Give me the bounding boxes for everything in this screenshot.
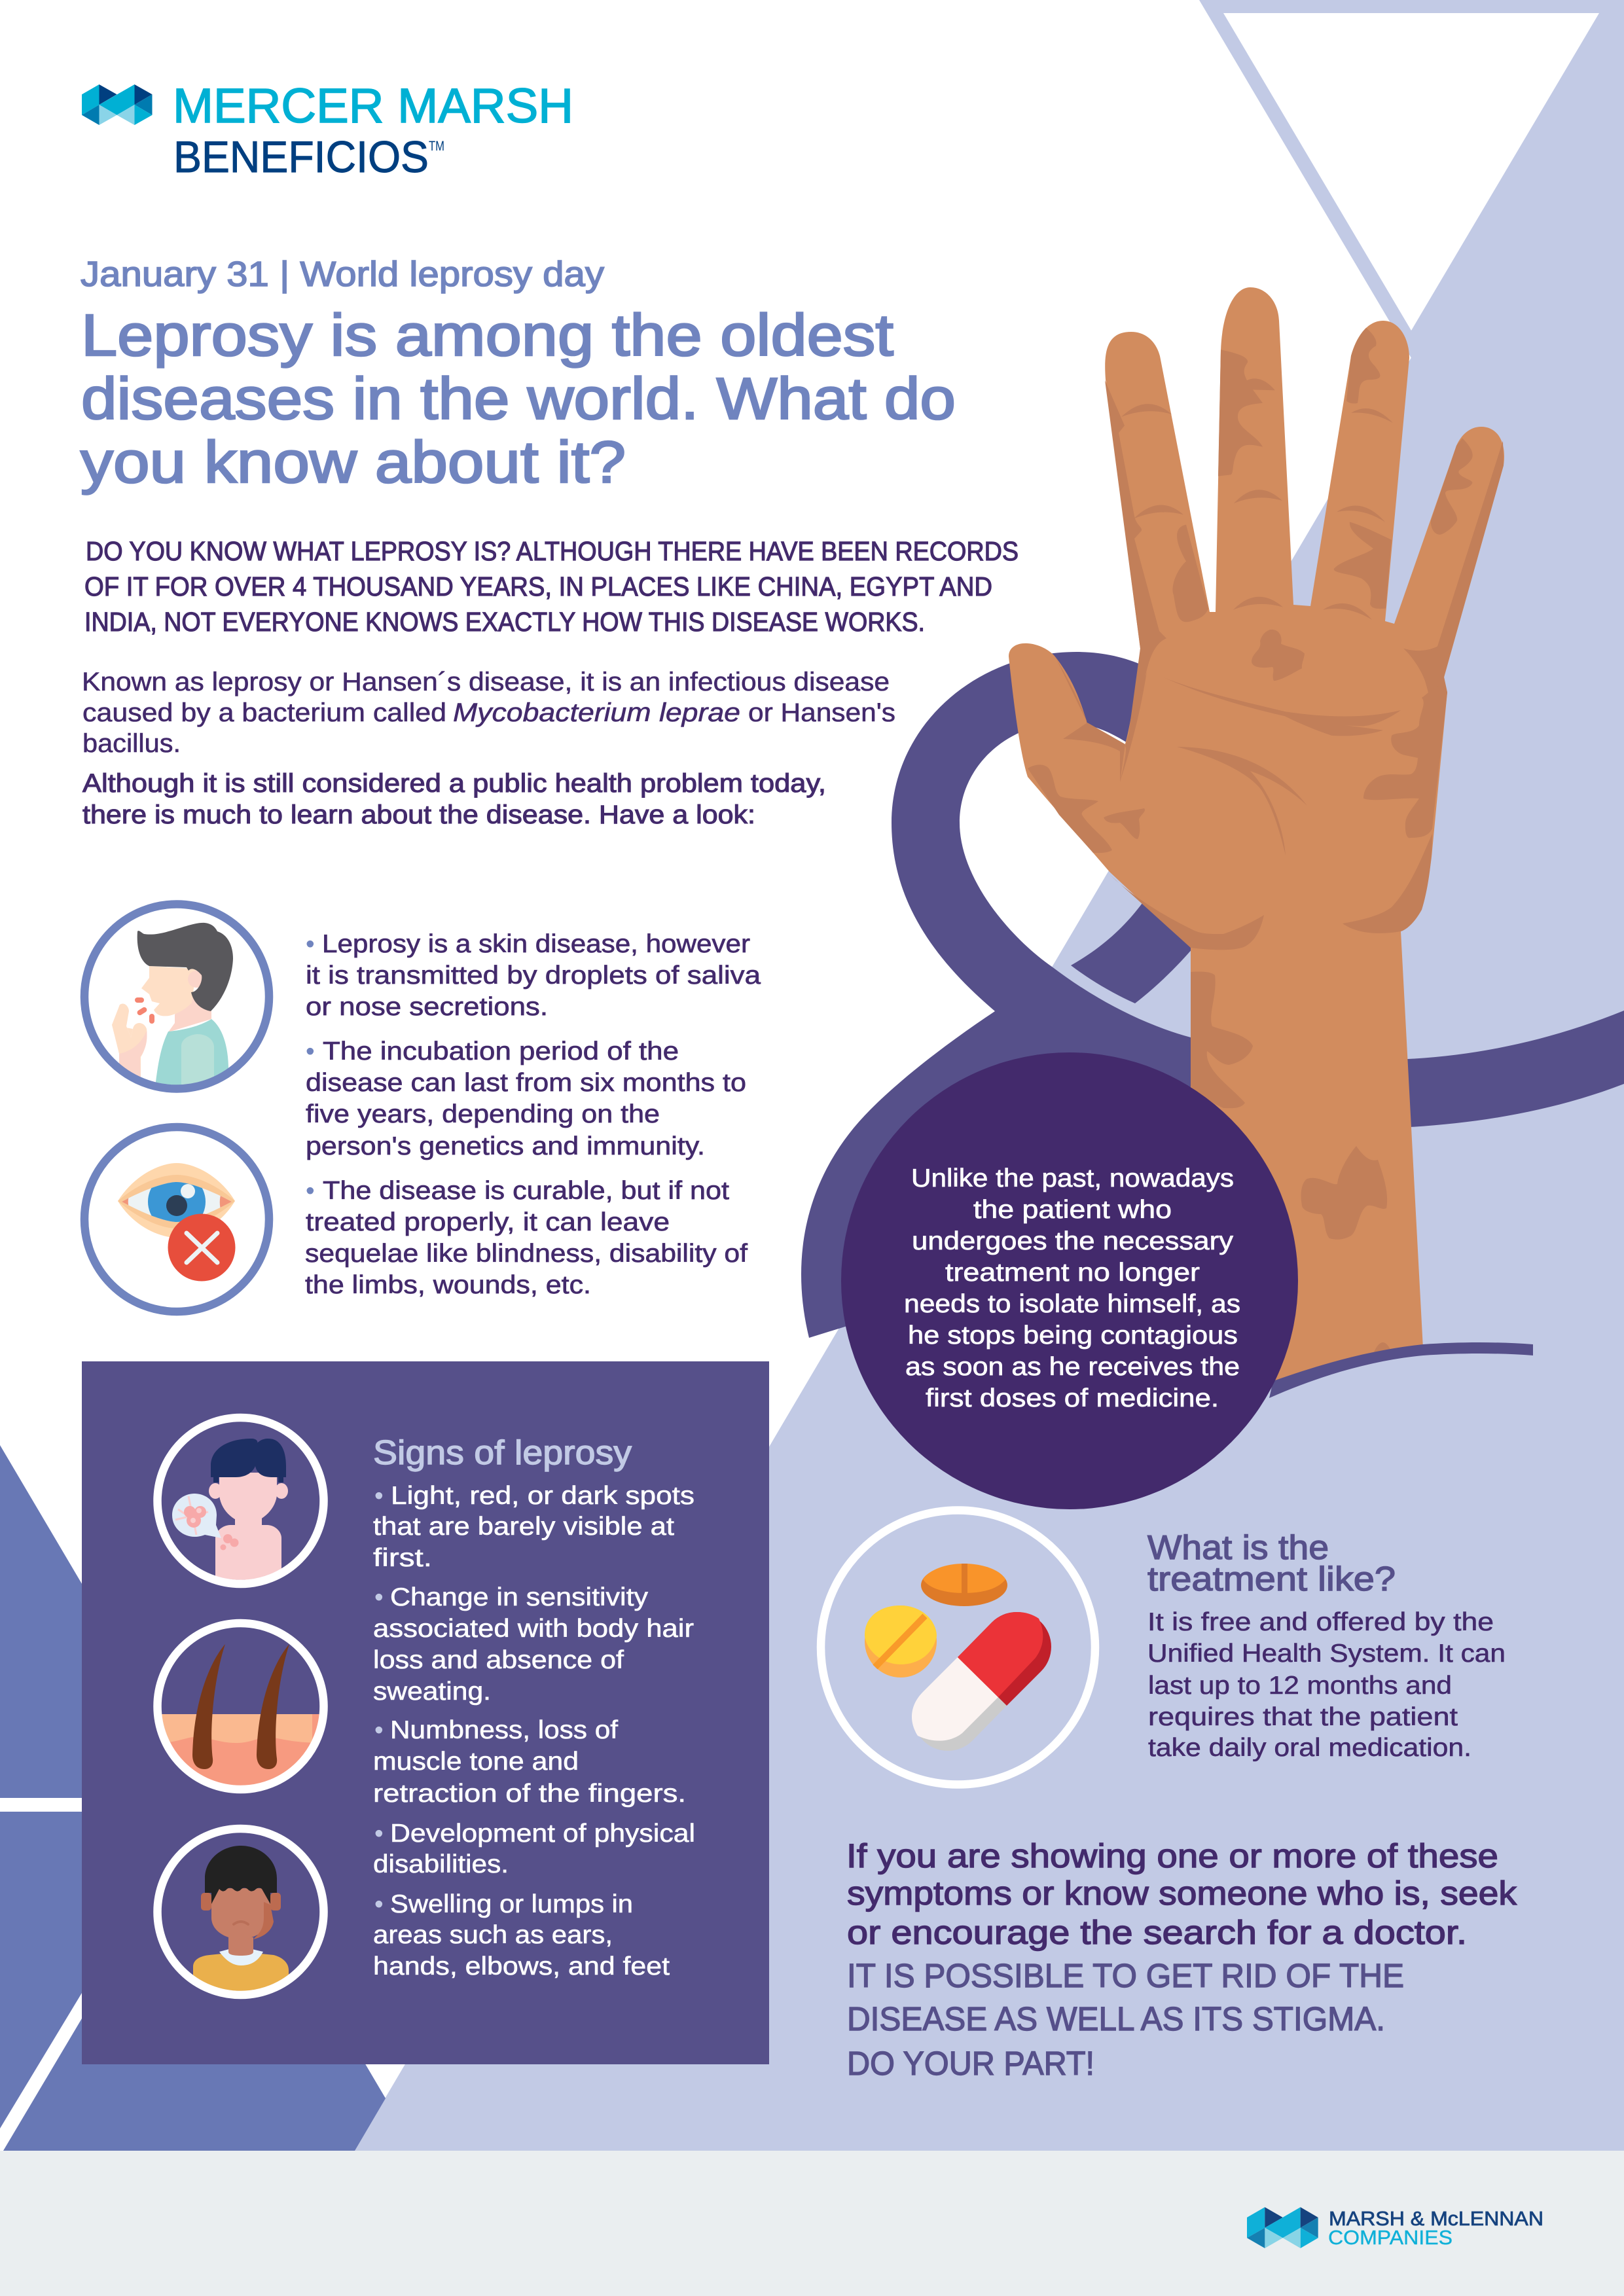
logo: Marsh & McLennan Companies bbox=[1247, 2207, 1543, 2249]
bullets: transmission, incubation, cure: • bbox=[306, 1037, 315, 1066]
callout circle: patient no longer isolates bbox=[841, 1052, 1298, 1509]
heading: what is the treatment like bbox=[1147, 1529, 1396, 1598]
text: treatment: It is free and offered by the bbox=[1147, 1608, 1494, 1636]
callout circle: patient no longer isolates: undergoes the necessary bbox=[912, 1227, 1234, 1255]
bullets: transmission, incubation, cure: sequelae like blindness, disability of bbox=[305, 1240, 748, 1268]
heading: what is the treatment like: What is the bbox=[1147, 1529, 1329, 1567]
bullets: transmission, incubation, cure: disease can last from six months to bbox=[306, 1069, 746, 1097]
text: have a look: Although it is still considered a public health problem today, bbox=[82, 769, 826, 798]
text: treatment bbox=[1147, 1608, 1506, 1762]
bullets: transmission, incubation, cure: treated properly, it can leave bbox=[306, 1208, 670, 1236]
heading: what is the treatment like: treatment like? bbox=[1147, 1560, 1396, 1598]
subtitle: January 31 | World leprosy day bbox=[81, 255, 604, 294]
callout circle: patient no longer isolates: treatment no longer bbox=[945, 1259, 1200, 1287]
icon: pills bbox=[821, 1511, 1095, 1784]
bullets: transmission, incubation, cure: five years, depending on the bbox=[306, 1100, 660, 1128]
icon: person with swelling bbox=[157, 1829, 323, 2003]
bullets: transmission, incubation, cure: or nose secretions. bbox=[306, 993, 548, 1021]
list: signs: Development of physical bbox=[390, 1820, 695, 1848]
icon: damaged eye bbox=[84, 1127, 269, 1312]
logo: Mercer Marsh Beneficios: BENEFICIOS bbox=[173, 132, 429, 182]
call to action: seek a doctor: or encourage the search for a doctor. bbox=[847, 1914, 1467, 1951]
bullets: transmission, incubation, cure: • bbox=[306, 1177, 315, 1205]
call to action: do your part: IT IS POSSIBLE TO GET RID OF THE bbox=[847, 1957, 1404, 1994]
call to action: seek a doctor: If you are showing one or more of these bbox=[846, 1837, 1498, 1874]
hand illustration bbox=[1009, 287, 1504, 1384]
text: treatment: last up to 12 months and bbox=[1148, 1672, 1452, 1700]
callout circle: patient no longer isolates: Unlike the past, nowadays bbox=[911, 1164, 1234, 1193]
list: signs bbox=[373, 1482, 695, 1981]
icon: person coughing bbox=[84, 905, 269, 1100]
list: signs: first. bbox=[373, 1544, 432, 1572]
text: have a look bbox=[82, 769, 826, 829]
list: signs: • bbox=[374, 1716, 384, 1744]
list: signs: hands, elbows, and feet bbox=[373, 1952, 670, 1981]
list: signs: sweating. bbox=[373, 1677, 491, 1706]
intro in capitals: OF IT FOR OVER 4 THOUSAND YEARS, IN PLACES LIKE CHINA, EGYPT AND bbox=[84, 571, 992, 601]
intro in capitals: DO YOU KNOW WHAT LEPROSY IS? ALTHOUGH THERE HAVE BEEN RECORDS bbox=[86, 536, 1019, 566]
logo: Mercer Marsh Beneficios: MERCER MARSH bbox=[173, 79, 573, 133]
text: have a look: there is much to learn about the disease. Have a look: bbox=[82, 800, 755, 829]
text: what leprosy is: Mycobacterium leprae bbox=[453, 698, 740, 727]
list: signs: that are barely visible at bbox=[373, 1513, 674, 1541]
callout circle: patient no longer isolates: the patient who bbox=[973, 1196, 1172, 1224]
list: signs: disabilities. bbox=[373, 1850, 509, 1878]
panel: signs of leprosy bbox=[82, 1361, 769, 2064]
logo: Marsh & McLennan Companies: COMPANIES bbox=[1328, 2226, 1453, 2249]
bullets: transmission, incubation, cure: The incubation period of the bbox=[323, 1037, 679, 1066]
call to action: do your part bbox=[847, 1957, 1404, 2082]
title bbox=[81, 303, 956, 495]
text: what leprosy is: Known as leprosy or Hansen´s disease, it is an infectious disease bbox=[82, 668, 890, 696]
list: signs: loss and absence of bbox=[373, 1646, 624, 1674]
list: signs: Numbness, loss of bbox=[390, 1716, 618, 1744]
call to action: seek a doctor: symptoms or know someone who is, seek bbox=[847, 1874, 1517, 1912]
text: what leprosy is: bacillus. bbox=[82, 729, 181, 758]
title: Leprosy is among the oldest bbox=[81, 303, 893, 368]
callout circle: patient no longer isolates: he stops being contagious bbox=[908, 1321, 1238, 1350]
logo: Mercer Marsh Beneficios: TM bbox=[429, 139, 444, 154]
ribbon curve at arm base bbox=[1269, 1342, 1533, 1398]
list: signs: associated with body hair bbox=[373, 1615, 694, 1643]
icon: skin spots bbox=[157, 1418, 323, 1590]
heading: signs of leprosy: Signs of leprosy bbox=[373, 1434, 632, 1472]
text: treatment: take daily oral medication. bbox=[1148, 1734, 1471, 1762]
list: signs: retraction of the fingers. bbox=[373, 1780, 686, 1808]
list: signs: • bbox=[374, 1820, 384, 1848]
bullets: transmission, incubation, cure: The disease is curable, but if not bbox=[323, 1177, 729, 1205]
bullets: transmission, incubation, cure: the limbs, wounds, etc. bbox=[305, 1271, 591, 1299]
intro in capitals: INDIA, NOT EVERYONE KNOWS EXACTLY HOW THIS DISEASE WORKS. bbox=[84, 607, 925, 637]
callout circle: patient no longer isolates: as soon as he receives the bbox=[905, 1353, 1240, 1381]
text: what leprosy is: or Hansen's bbox=[748, 698, 895, 727]
list: signs: • bbox=[374, 1583, 384, 1611]
list: signs: areas such as ears, bbox=[373, 1921, 613, 1949]
list: signs: Swelling or lumps in bbox=[390, 1890, 633, 1918]
text: treatment: requires that the patient bbox=[1148, 1703, 1458, 1731]
logo: Marsh & McLennan Companies: MARSH & McLENNAN bbox=[1329, 2207, 1543, 2230]
list: signs: • bbox=[374, 1482, 384, 1510]
callout circle: patient no longer isolates: needs to isolate himself, as bbox=[904, 1290, 1240, 1318]
list: signs: Change in sensitivity bbox=[390, 1583, 649, 1611]
intro in capitals bbox=[84, 536, 1019, 637]
callout circle: patient no longer isolates: first doses of medicine. bbox=[926, 1384, 1219, 1412]
bullets: transmission, incubation, cure bbox=[305, 930, 761, 1299]
bullets: transmission, incubation, cure: person's genetics and immunity. bbox=[306, 1132, 705, 1160]
bullets: transmission, incubation, cure: • bbox=[306, 930, 315, 958]
bullets: transmission, incubation, cure: it is transmitted by droplets of saliva bbox=[306, 961, 761, 990]
icon: hair follicles bbox=[157, 1623, 324, 1793]
list: signs: Light, red, or dark spots bbox=[391, 1482, 695, 1510]
logo: Mercer Marsh Beneficios bbox=[82, 79, 573, 182]
text: what leprosy is bbox=[82, 668, 895, 758]
ribbon bbox=[801, 652, 1624, 1338]
call to action: do your part: DO YOUR PART! bbox=[847, 2045, 1094, 2082]
text: treatment: Unified Health System. It can bbox=[1147, 1640, 1506, 1668]
text: what leprosy is: caused by a bacterium called bbox=[82, 698, 446, 727]
list: signs: • bbox=[374, 1890, 384, 1918]
call to action: seek a doctor bbox=[846, 1837, 1517, 1951]
call to action: do your part: DISEASE AS WELL AS ITS STIGMA. bbox=[847, 2000, 1385, 2037]
title: you know about it? bbox=[81, 430, 626, 495]
bullets: transmission, incubation, cure: Leprosy is a skin disease, however bbox=[322, 930, 750, 958]
title: diseases in the world. What do bbox=[81, 367, 956, 432]
list: signs: muscle tone and bbox=[373, 1748, 579, 1776]
